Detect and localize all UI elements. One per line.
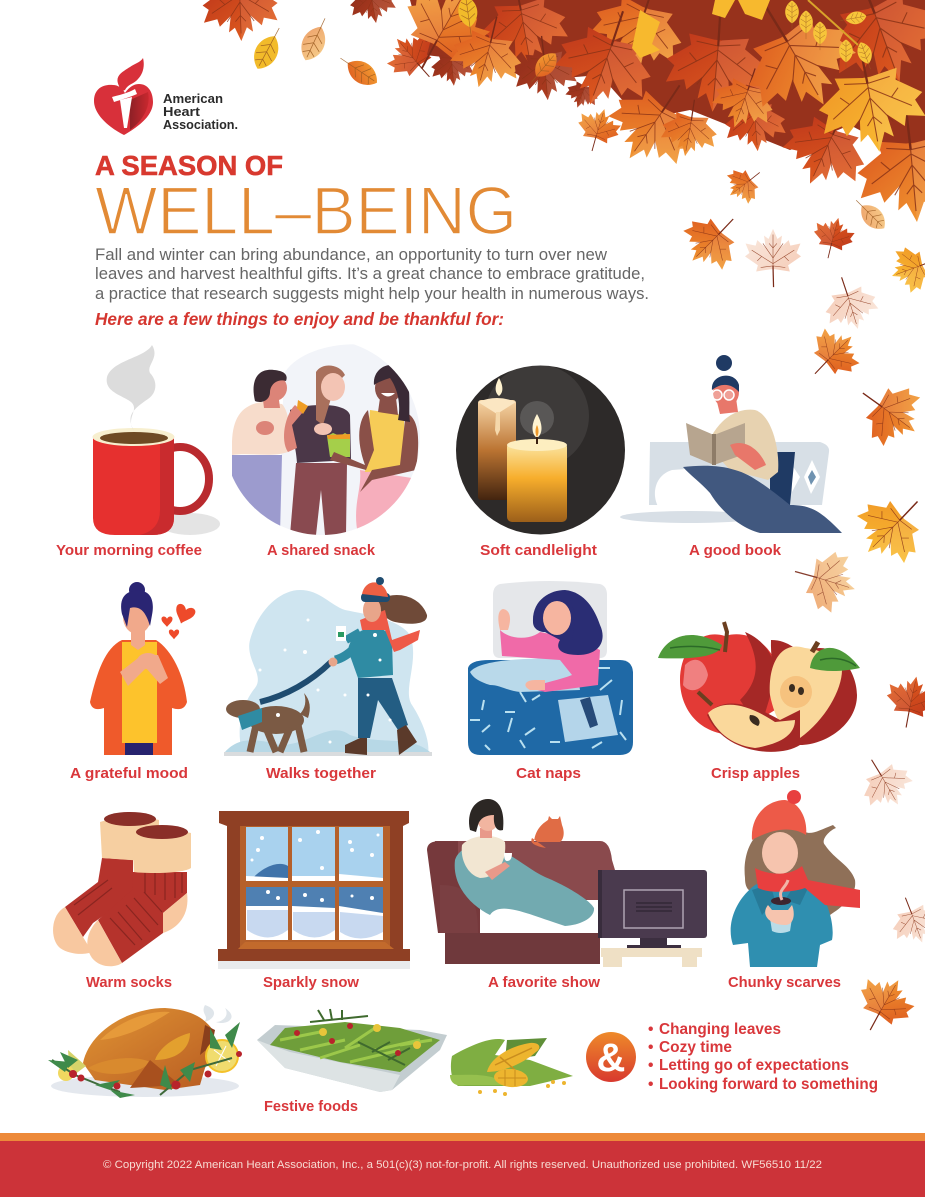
American Heart Association logo: American xyxy=(163,92,223,106)
icon: green bean casserole xyxy=(257,1009,447,1092)
icon: warm socks xyxy=(53,812,191,966)
intro subheading: Here are a few things to enjoy and be thankful for: xyxy=(95,309,504,329)
icon: window with snow xyxy=(218,811,410,969)
list: more things to be thankful for: Looking forward to something xyxy=(659,1076,878,1093)
label: soft candlelight: Soft candlelight xyxy=(480,542,597,559)
falling leaves: right margin xyxy=(572,103,925,1044)
list: more things to be thankful for: Changing leaves xyxy=(659,1021,781,1038)
label: crisp apples: Crisp apples xyxy=(711,765,800,782)
title: well-being: WELL–BEING xyxy=(95,173,517,249)
icon: friends sharing a snack xyxy=(232,344,420,535)
icon: apples xyxy=(658,622,860,752)
label: a good book: A good book xyxy=(689,542,782,559)
intro paragraph: leaves and harvest healthful gifts. It’s a great chance to embrace gratitude, xyxy=(95,265,645,283)
intro paragraph: Fall and winter can bring abundance, an opportunity to turn over new xyxy=(95,246,607,264)
American Heart Association logo: Association. xyxy=(163,118,238,132)
list: more things to be thankful for: Letting go of expectations xyxy=(659,1057,849,1074)
icon: coffee mug xyxy=(92,345,220,535)
label: festive foods: Festive foods xyxy=(264,1098,358,1115)
footer band: © Copyright 2022 American Heart Association, Inc., a 501(c)(3) not-for-profit. All rights reserved. Unauthorized use prohibited. WF56510 11/22 xyxy=(103,1159,822,1171)
label: cat naps: Cat naps xyxy=(516,765,581,782)
leaf cluster: top right xyxy=(379,0,925,227)
leaves: top left group xyxy=(201,0,398,91)
American Heart Association logo: Heart xyxy=(163,105,201,119)
list: more things to be thankful for: • xyxy=(648,1057,653,1074)
list: more things to be thankful for: • xyxy=(648,1076,653,1093)
icon: walking the dog in snow xyxy=(224,577,432,756)
label: warm socks: Warm socks xyxy=(86,974,172,991)
label: your morning coffee: Your morning coffee xyxy=(56,542,202,559)
list: more things to be thankful for: • xyxy=(648,1039,653,1056)
title: a season of: A SEASON OF xyxy=(95,150,283,181)
icon: ampersand badge xyxy=(586,1032,636,1082)
icon: woman with chunky scarf xyxy=(731,790,860,967)
label: walks together: Walks together xyxy=(266,765,376,782)
icon: sleeping person in bed xyxy=(468,581,633,755)
icon: person reading a book xyxy=(620,355,842,533)
label: chunky scarves: Chunky scarves xyxy=(728,974,841,991)
label: a shared snack: A shared snack xyxy=(267,542,376,559)
American Heart Association logo xyxy=(94,58,238,135)
icon: candles xyxy=(456,364,625,534)
icon: roast turkey xyxy=(48,1005,242,1098)
intro paragraph: a practice that research suggests might help your health in numerous ways. xyxy=(95,285,649,303)
label: a favorite show: A favorite show xyxy=(488,974,600,991)
intro paragraph xyxy=(95,246,649,303)
icon: ampersand badge: & xyxy=(597,1036,625,1080)
icon: person on sofa watching tv xyxy=(427,799,707,967)
icon: corn xyxy=(450,1038,573,1096)
icon: grateful person with hearts xyxy=(90,582,197,755)
list: more things to be thankful for xyxy=(648,1021,878,1093)
list: more things to be thankful for: • xyxy=(648,1021,653,1038)
label: sparkly snow: Sparkly snow xyxy=(263,974,359,991)
list: more things to be thankful for: Cozy time xyxy=(659,1039,732,1056)
footer band xyxy=(0,1133,925,1197)
label: a grateful mood: A grateful mood xyxy=(70,765,188,782)
